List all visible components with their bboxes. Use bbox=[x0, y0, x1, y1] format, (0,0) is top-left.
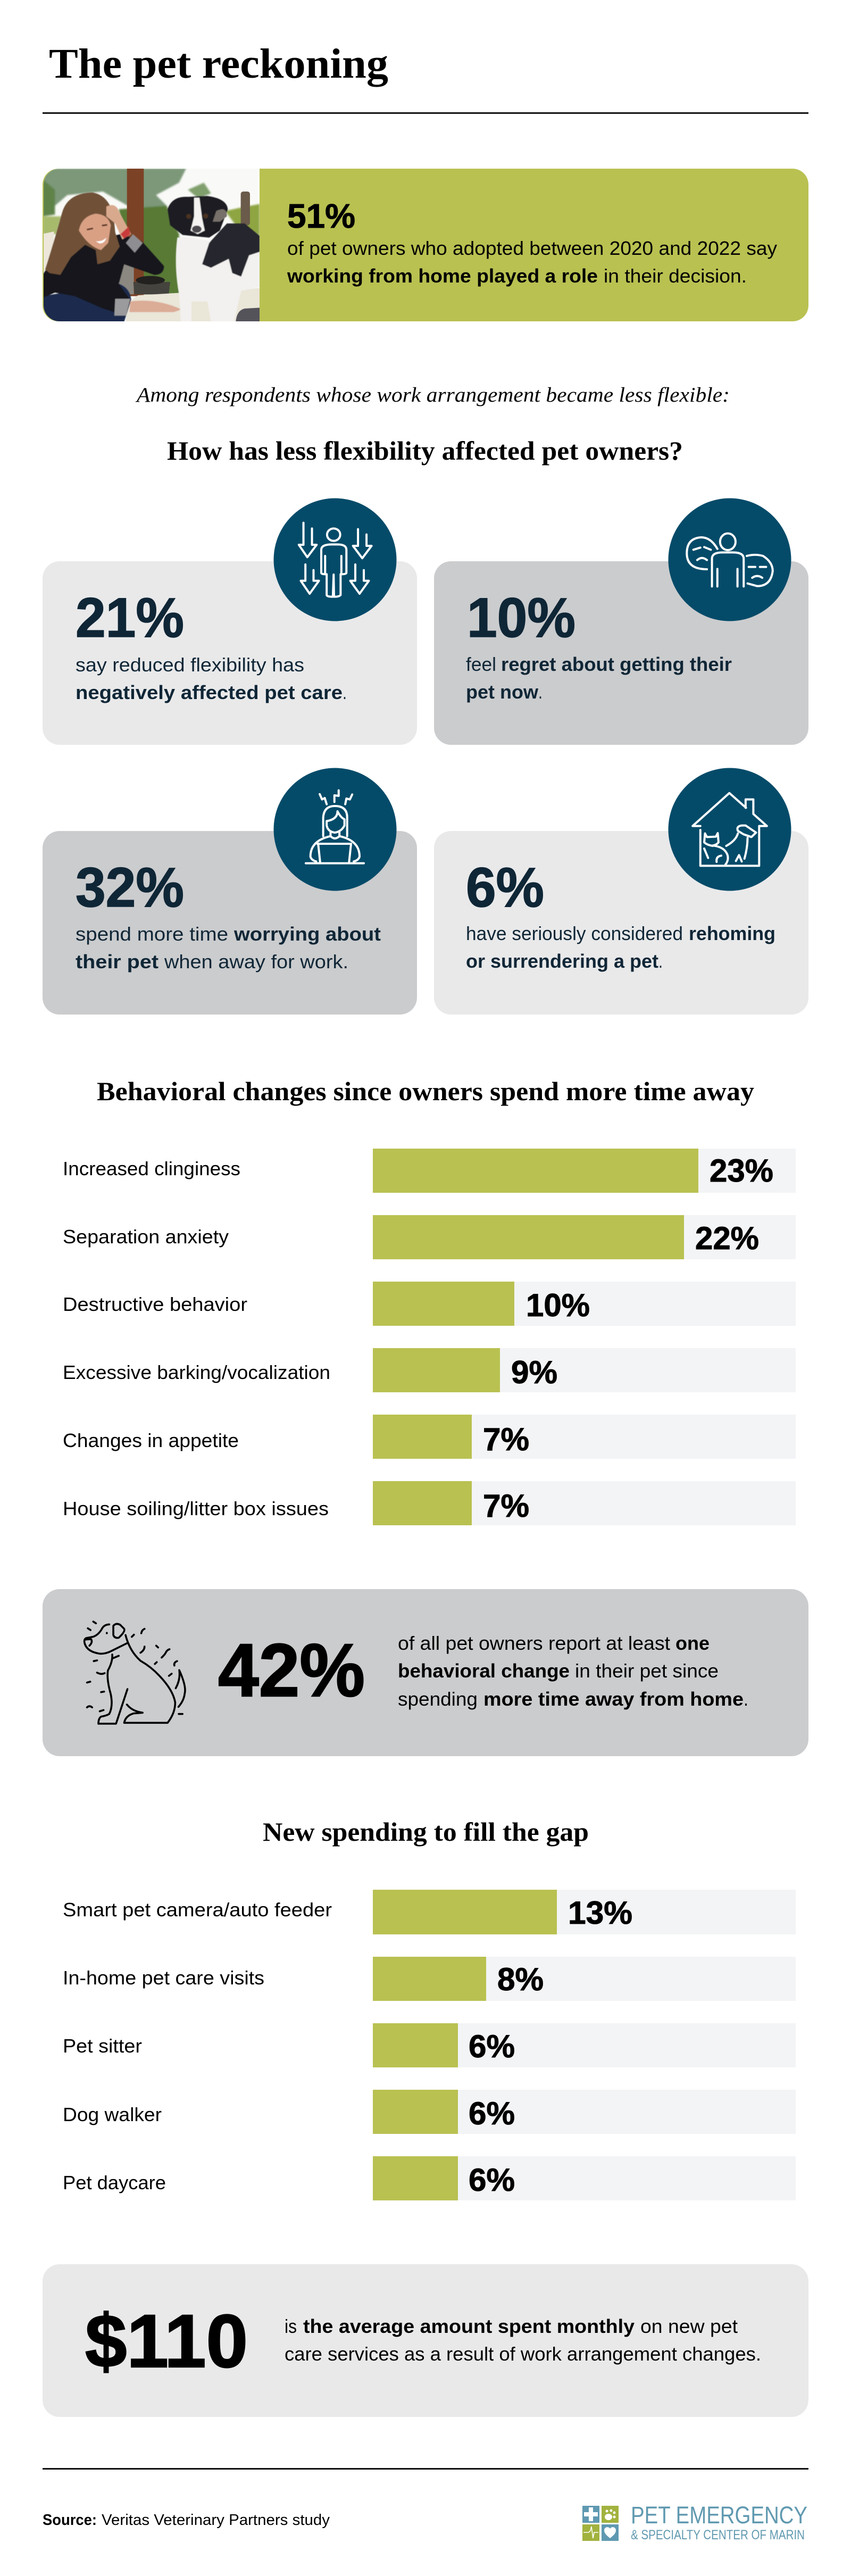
icon: person between sad faces bbox=[668, 498, 791, 621]
bar: changes in appetite 7% bbox=[63, 1415, 796, 1459]
icon: person with falling arrows bbox=[273, 498, 397, 621]
panel: 42% callout bbox=[43, 1589, 808, 1756]
panel: $110 callout bbox=[43, 2264, 808, 2417]
card text: . bbox=[343, 682, 347, 703]
callout text bbox=[285, 2315, 761, 2365]
icon: anxious dog bbox=[85, 1622, 185, 1724]
stat: $110: $110 bbox=[85, 2299, 248, 2383]
card text: negatively affected pet care bbox=[76, 682, 343, 703]
bar: changes in appetite 7%: Changes in appetite bbox=[63, 1430, 239, 1451]
bar: separation anxiety 22%: 22% bbox=[695, 1220, 759, 1256]
bar: excessive barking 9%: 9% bbox=[511, 1355, 557, 1390]
hero text: working from home played a role bbox=[287, 265, 598, 287]
card text: . bbox=[538, 681, 543, 703]
panel: 6% card bbox=[434, 768, 808, 1015]
bar: dog walker 6%: 6% bbox=[469, 2096, 515, 2131]
stat: 42%: 42% bbox=[218, 1628, 365, 1712]
bar: house soiling 7%: House soiling/litter box issues bbox=[63, 1498, 329, 1519]
bar: dog walker 6%: Dog walker bbox=[63, 2104, 162, 2125]
bar: smart pet camera 13% bbox=[63, 1890, 796, 1934]
callout text: on new pet bbox=[640, 2315, 738, 2337]
callout text: is bbox=[285, 2315, 297, 2337]
bar: dog walker 6% bbox=[63, 2090, 796, 2134]
card text: . bbox=[658, 950, 663, 972]
logo: Pet Emergency and Specialty Center of Marin: & SPECIALTY CENTER OF MARIN bbox=[631, 2528, 805, 2542]
heading: how has less flexibility affected pet owners: How has less flexibility affected pet owners? bbox=[167, 436, 683, 466]
bar: destructive behavior 10%: 10% bbox=[526, 1287, 590, 1323]
bar: separation anxiety 22% bbox=[63, 1215, 796, 1259]
bar: pet sitter 6%: Pet sitter bbox=[63, 2035, 142, 2057]
bar: excessive barking 9%: Excessive barking/vocalization bbox=[63, 1361, 330, 1383]
stat: 10%: 10% bbox=[467, 587, 575, 649]
card text: regret about getting their bbox=[501, 653, 732, 675]
bar: destructive behavior 10%: Destructive behavior bbox=[63, 1293, 247, 1315]
icon: house with cat and dog bbox=[668, 768, 791, 891]
card text bbox=[466, 923, 775, 972]
callout text: behavioral change bbox=[398, 1660, 570, 1682]
card text bbox=[466, 653, 732, 703]
title: The pet reckoning bbox=[49, 41, 388, 87]
logo: Pet Emergency and Specialty Center of Marin bbox=[582, 2502, 807, 2542]
bar: pet daycare 6% bbox=[63, 2156, 796, 2200]
panel: 21% card bbox=[43, 498, 417, 745]
bar: house soiling 7%: 7% bbox=[483, 1488, 529, 1524]
icon: stressed woman at laptop bbox=[273, 768, 397, 891]
card text: or surrendering a pet bbox=[466, 950, 658, 972]
subtitle: respondents note: Among respondents whose work arrangement became less flexible: bbox=[135, 384, 730, 406]
panel: 10% card bbox=[434, 498, 808, 745]
bar: in-home visits 8%: 8% bbox=[497, 1962, 544, 1997]
card text: rehoming bbox=[689, 923, 775, 944]
bar: pet daycare 6%: Pet daycare bbox=[63, 2172, 166, 2193]
callout text: more time away from home bbox=[483, 1688, 744, 1710]
callout text: in their pet since bbox=[575, 1660, 719, 1682]
card text bbox=[76, 923, 381, 973]
card text: say reduced flexibility has bbox=[76, 654, 304, 676]
callout text bbox=[398, 1632, 748, 1710]
bar: in-home visits 8%: In-home pet care visits bbox=[63, 1967, 264, 1989]
photo: woman with dog bbox=[43, 169, 261, 323]
panel: 51% hero callout bbox=[43, 169, 808, 323]
bar: increased clinginess 23%: 23% bbox=[710, 1153, 773, 1189]
stat: 21%: 21% bbox=[76, 587, 184, 649]
callout text: spending bbox=[398, 1688, 478, 1710]
card text: their pet bbox=[76, 951, 158, 973]
bar chart: new spending bbox=[63, 1890, 796, 2200]
stat: 6%: 6% bbox=[466, 857, 544, 919]
hero text: in their decision. bbox=[604, 265, 747, 287]
heading: behavioral changes: Behavioral changes since owners spend more time away bbox=[97, 1076, 754, 1106]
bar: smart pet camera 13%: Smart pet camera/auto feeder bbox=[63, 1899, 332, 1921]
logo: Pet Emergency and Specialty Center of Marin: PET EMERGENCY bbox=[631, 2502, 807, 2529]
card text: spend more time bbox=[76, 923, 228, 945]
bar: pet sitter 6%: 6% bbox=[469, 2029, 515, 2064]
hero text bbox=[287, 237, 777, 287]
bar: in-home visits 8% bbox=[63, 1957, 796, 2001]
card text: pet now bbox=[466, 681, 539, 703]
bar: changes in appetite 7%: 7% bbox=[483, 1422, 529, 1457]
callout text: one bbox=[675, 1632, 710, 1654]
stat: 51%: 51% bbox=[287, 197, 355, 235]
bar chart: behavioral changes bbox=[63, 1149, 796, 1525]
bar: house soiling 7% bbox=[63, 1481, 796, 1525]
callout text: of all pet owners report at least bbox=[398, 1632, 670, 1654]
card text: feel bbox=[466, 653, 496, 675]
bar: increased clinginess 23% bbox=[63, 1149, 796, 1193]
bar: smart pet camera 13%: 13% bbox=[568, 1895, 632, 1931]
bar: pet daycare 6%: 6% bbox=[469, 2162, 515, 2198]
panel: 32% card bbox=[43, 768, 417, 1015]
logo mark bbox=[582, 2506, 619, 2541]
bar: separation anxiety 22%: Separation anxiety bbox=[63, 1226, 229, 1248]
bar: destructive behavior 10% bbox=[63, 1282, 796, 1326]
hero text: of pet owners who adopted between 2020 and 2022 say bbox=[287, 237, 777, 259]
card text: worrying about bbox=[233, 923, 381, 945]
stat: 32%: 32% bbox=[76, 857, 184, 919]
source note: Source: bbox=[43, 2512, 97, 2529]
callout text: . bbox=[744, 1688, 748, 1710]
bar: excessive barking 9% bbox=[63, 1348, 796, 1392]
callout text: the average amount spent monthly bbox=[303, 2315, 635, 2337]
heading: new spending: New spending to fill the gap bbox=[263, 1817, 589, 1847]
callout text: care services as a result of work arrangement changes. bbox=[285, 2343, 761, 2365]
bar: increased clinginess 23%: Increased clinginess bbox=[63, 1158, 240, 1179]
card text bbox=[76, 654, 347, 703]
card text: have seriously considered bbox=[466, 923, 683, 944]
card text: when away for work. bbox=[164, 951, 348, 973]
bar: pet sitter 6% bbox=[63, 2023, 796, 2067]
source note: Veritas Veterinary Partners study bbox=[102, 2512, 330, 2529]
